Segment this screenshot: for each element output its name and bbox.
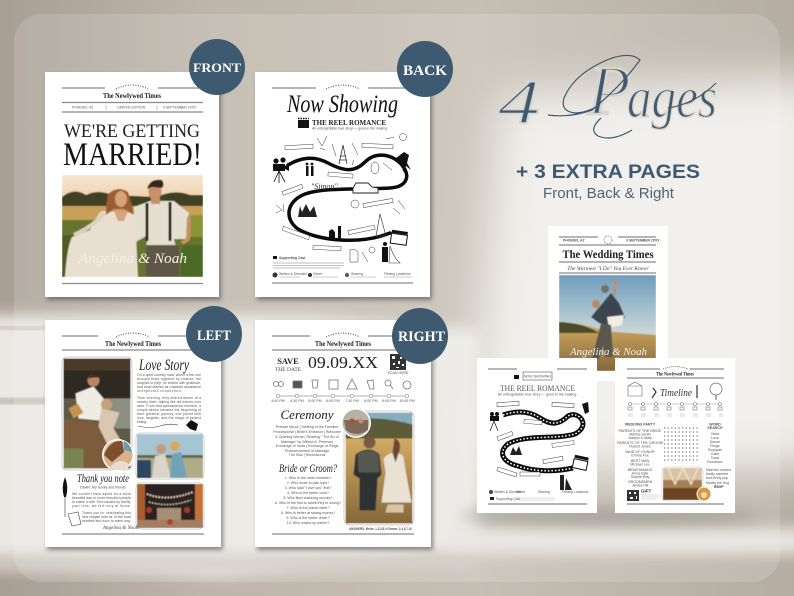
credits: Written & Directed — [494, 490, 522, 494]
icon: scroll — [68, 512, 81, 526]
photo: couple in field: Angelina & Noah — [78, 251, 187, 267]
photo: couple in field — [62, 175, 203, 277]
word list — [707, 422, 723, 464]
wedding party list: PARENTS OF THE BRIDE — [619, 429, 662, 433]
word list: Cake — [711, 452, 719, 456]
gift note: GIFT — [641, 488, 651, 494]
thank you text: beautiful day or more beautiful people — [72, 496, 131, 500]
wedding day timeline — [271, 379, 415, 403]
love story text: love, laughter, and the magic of perfect — [137, 416, 201, 420]
heading: love story: Love Story — [138, 357, 190, 374]
masthead: right — [272, 333, 414, 534]
wedding party list: Michael Lee — [630, 462, 650, 466]
wedding party list: Joseph & Mary — [628, 436, 652, 440]
word search — [664, 428, 700, 460]
thank you text: to share it with. Surrounded by family, — [72, 500, 131, 504]
credits: Filming Locations — [562, 490, 589, 494]
quiz questions: 1. Who is the most romantic? — [285, 476, 331, 480]
quiz questions: 10. Who wakes up earlier? — [287, 521, 329, 525]
word list: Vows — [711, 432, 719, 436]
icon: film camera — [273, 157, 289, 183]
badge: back: BACK — [403, 63, 447, 79]
wedding party list: PARENTS OF THE GROOM — [617, 441, 663, 445]
masthead: left — [62, 333, 204, 534]
icon: proposal — [329, 226, 341, 239]
icon: dancing couple — [396, 152, 411, 172]
love story text: wine. From that spontaneous moment, a — [137, 404, 201, 408]
icon: film camera — [490, 412, 499, 431]
masthead: wedding times — [559, 236, 660, 273]
save the date: 09.09.XX — [308, 353, 378, 372]
wedding day timeline: 9:00 PM — [382, 399, 396, 403]
love story text: simple detour became the beginning of — [137, 408, 201, 412]
icon: clapperboard — [572, 455, 589, 470]
masthead: The Newlywed Times — [656, 372, 694, 378]
badge: back — [397, 41, 453, 97]
title: 4 pages — [498, 53, 717, 138]
title: 4 pages: ages — [627, 65, 717, 130]
subtitle: + 3 EXTRA PAGES — [516, 162, 700, 183]
quiz questions: 6. Who is the first to admit they're wrong? — [275, 501, 341, 505]
quiz questions: 9. Who is the better driver? — [286, 516, 330, 520]
film road — [503, 412, 583, 471]
icon: castle — [510, 446, 522, 455]
page: back — [255, 72, 432, 300]
headline — [63, 121, 202, 173]
heading: bride or groom: Bride or Groom? — [279, 461, 337, 475]
credits: Filming Locations — [384, 272, 411, 276]
badge: right — [392, 308, 448, 364]
heading: now showing: Now Showing — [286, 91, 398, 118]
wedding party list: Sophie Ray — [631, 475, 649, 479]
icon: QR code: SCAN HERE — [388, 371, 409, 375]
love story text — [137, 373, 202, 424]
credits — [489, 490, 589, 501]
love story text: nearby diner, talking like old friends over — [137, 400, 202, 404]
icon: feather — [63, 477, 67, 517]
timeline heading and sketches: Timeline — [660, 388, 693, 399]
photo: string lights table — [136, 483, 204, 529]
subtitle: Front, Back & Right — [543, 185, 675, 202]
wedding day timeline: 7:30 PM — [345, 399, 359, 403]
masthead: wedding times: 9 SEPTEMBER 2XXX — [626, 238, 660, 242]
page: front — [45, 72, 221, 300]
photo: couple dip — [559, 275, 656, 371]
now showing label — [514, 372, 552, 380]
pet note: family member — [706, 472, 729, 476]
pet note: Meet the newest — [706, 468, 731, 472]
wedding party list: Robert Jones — [629, 444, 651, 448]
quiz questions: 8. Who is better at saving money? — [281, 511, 335, 515]
timeline heading and sketches — [628, 382, 722, 400]
masthead: front: PHOENIX, AZ — [72, 106, 93, 110]
love story text: brought them together by chance, the — [137, 377, 201, 381]
pet note: RSVP — [714, 485, 724, 489]
masthead: front: The Newlywed Times — [103, 92, 161, 100]
masthead: left: The Newlywed Times — [105, 340, 161, 348]
badge: right: RIGHT — [398, 329, 445, 345]
wedding day timeline: 4:00 PM — [271, 399, 285, 403]
word list: Love — [711, 436, 719, 440]
photo: couple in car — [136, 433, 204, 479]
icon: QR code — [388, 354, 409, 375]
thank you text: DEAR, My family and friends — [80, 486, 126, 490]
badge: left: LEFT — [197, 328, 231, 344]
icon: vintage car — [353, 183, 378, 193]
pet note — [706, 468, 731, 489]
quiz questions — [275, 476, 341, 525]
masthead: right: The Newlywed Times — [315, 340, 371, 348]
word list: Romance — [707, 460, 723, 464]
headline: MARRIED! — [63, 137, 202, 173]
icon: QR code — [627, 490, 639, 501]
thank you text: We couldn't have asked for a more — [72, 492, 131, 496]
ceremony order: & Opening Words | Reading: "The Art of — [275, 435, 339, 439]
wedding day timeline: 5:00 PM — [308, 399, 322, 403]
badge: left — [186, 306, 242, 362]
quiz questions: 5. Who likes watching movies? — [283, 496, 333, 500]
photo: couple dip: Angelina & Noah — [569, 346, 647, 358]
icon: cupid — [138, 420, 198, 431]
credits: Written & Directed — [279, 272, 307, 276]
ceremony order — [273, 425, 341, 457]
icon: clapperboard — [390, 230, 408, 245]
masthead: front: 9 SEPTEMBER 2XXX — [163, 106, 197, 110]
icon: couple meeting — [306, 163, 314, 176]
heading: the reel romance — [498, 383, 576, 396]
film banners — [282, 143, 393, 251]
icon: castle — [298, 204, 317, 217]
icon: dancer — [582, 402, 589, 414]
icon: sketches — [276, 134, 406, 262]
masthead: front — [62, 85, 203, 112]
badge: front — [189, 39, 245, 95]
photo: reception — [662, 467, 703, 501]
heading: now showing — [286, 91, 398, 130]
credits: Supporting Cast — [496, 497, 520, 501]
gift note — [641, 488, 660, 499]
quiz questions: 4. Who is the better cook? — [287, 491, 329, 495]
inset photo: picnic — [341, 408, 371, 438]
heading: the reel romance: THE REEL ROMANCE — [500, 383, 575, 393]
wedding party list: BEST MAN — [631, 459, 650, 463]
wedding day timeline: 6:00 PM — [326, 399, 340, 403]
word list: Dance — [710, 440, 720, 444]
wedding party list: Anna Dale — [632, 472, 648, 476]
word list: Toast — [711, 456, 719, 460]
quiz questions: 7. Who is the planet eater? — [287, 506, 329, 510]
wedding party list: James Hill — [632, 484, 648, 488]
wedding day timeline: 4:30 PM — [290, 399, 304, 403]
masthead: front: LIMITED EDITION — [117, 106, 146, 110]
icon: eiffel tower — [339, 145, 347, 164]
now showing label: NOW SHOWING — [524, 374, 551, 378]
credits: Supporting Cast — [279, 256, 306, 260]
title: 4 pages: P — [587, 53, 631, 130]
masthead: wedding times: The Warmest "I Do" You Ever Knew! — [567, 266, 649, 272]
wedding day timeline: 10:00 PM — [399, 399, 415, 403]
ceremony order: The Kiss | Recessional — [289, 453, 325, 457]
word list: Rings — [710, 444, 720, 448]
love story text: stopped to help, he smiled with gratitude, — [137, 381, 201, 385]
heading: the reel romance: An unforgettable love story — good in the making — [498, 392, 576, 396]
handwritten label: Simon: "Simon" — [311, 182, 338, 191]
wedding party list: BRIDESMAIDS — [628, 468, 653, 472]
pet note: Marley the Dog — [706, 481, 729, 485]
credits: Starring — [351, 272, 363, 276]
love story text: timing. — [137, 420, 147, 424]
thank you text: Angelina & Noah — [102, 526, 139, 531]
wedding party list: GROOMSMEN — [628, 480, 653, 484]
ceremony order: Marriage" by Wilferd A. Peterson — [281, 440, 333, 444]
thank you text: heartfelt and soon to warm way. — [82, 519, 131, 523]
quiz questions: 3. Who said "I love you" first? — [285, 486, 331, 490]
headline: WE'RE GETTING — [64, 121, 200, 142]
ceremony order: Prelude Music | Seating of the Families — [276, 425, 338, 429]
masthead: wedding times: The Wedding Times — [562, 247, 654, 261]
heading: now showing: THE REEL ROMANCE — [312, 119, 386, 127]
photo: couple walking — [344, 411, 414, 525]
extra page: timeline and word search — [615, 358, 735, 513]
title: 4 pages: 4 — [498, 69, 540, 137]
masthead: wedding times: PHOENIX, AZ — [563, 238, 585, 242]
ceremony order: Processional | Bride's Entrance | Welcome — [273, 430, 341, 434]
story sketches — [497, 401, 574, 477]
wedding party list: Martha Smith — [629, 432, 651, 436]
word list: SEARCH — [707, 426, 723, 430]
love story text: their greatest journey, one paved with — [137, 412, 201, 416]
icon: bride and groom — [560, 475, 572, 490]
credits: Starring — [538, 490, 550, 494]
heading: now showing: An unforgettable love story — good in the making — [312, 126, 387, 130]
save the date — [275, 353, 378, 373]
wedding party list: MAID OF HONOR — [625, 450, 655, 454]
timeline — [628, 402, 723, 416]
heading: thank you note: Thank you note — [77, 471, 129, 485]
inset photo: kiss — [102, 439, 134, 471]
page: right — [255, 320, 433, 550]
wedding party list — [617, 422, 663, 488]
badge: front: FRONT — [193, 60, 241, 75]
subtitle — [516, 162, 700, 202]
thank you text: new chapter with us. In the most — [82, 515, 131, 519]
icon: bride and groom — [382, 242, 400, 263]
answer key: ANSWERS: Bride: 1,3,5,8,9 Groom: 2,4,6,7,10 — [349, 527, 412, 531]
film road — [288, 155, 407, 240]
icon: church — [376, 214, 386, 236]
love story text: Then evening, they shared dinner at a — [137, 396, 201, 400]
credits: Genre — [313, 272, 323, 276]
wedding party list: WEDDING PARTY — [625, 422, 656, 426]
love story text: and what started as roadside assistance — [137, 385, 201, 389]
extra page: the wedding times — [548, 226, 668, 381]
word list: Bouquet — [708, 448, 722, 452]
pet note: and lovely pup — [706, 476, 728, 480]
photo: couple on bench — [62, 357, 132, 470]
save the date: SAVE — [277, 356, 299, 366]
ceremony order: Exchange of Vows | Exchange of Rings — [276, 444, 339, 448]
love story text: On a quiet country road, where a fire one — [137, 373, 201, 377]
love story text: unexpected connection. — [137, 389, 182, 393]
thank you text — [72, 486, 139, 531]
masthead — [627, 366, 724, 504]
thank you text: Thank you for celebrating this — [82, 511, 131, 515]
page: left — [45, 320, 223, 550]
wedding day timeline: 8:00 PM — [364, 399, 378, 403]
heading: ceremony: Ceremony — [281, 407, 334, 422]
quiz questions: 2. Who loves to plan trips? — [287, 481, 329, 485]
save the date: THE DATE — [275, 367, 302, 373]
ceremony order: Pronouncement of Marriage — [285, 449, 329, 453]
wedding party list: Emma Fox — [631, 454, 649, 458]
inset photo: dog — [696, 486, 712, 502]
credits: Genre — [516, 490, 526, 494]
extra page: reel romance — [477, 358, 597, 513]
word list: WORD — [709, 422, 721, 426]
thank you text: your love, we felt truly at home. — [72, 504, 131, 508]
credits — [272, 256, 412, 278]
